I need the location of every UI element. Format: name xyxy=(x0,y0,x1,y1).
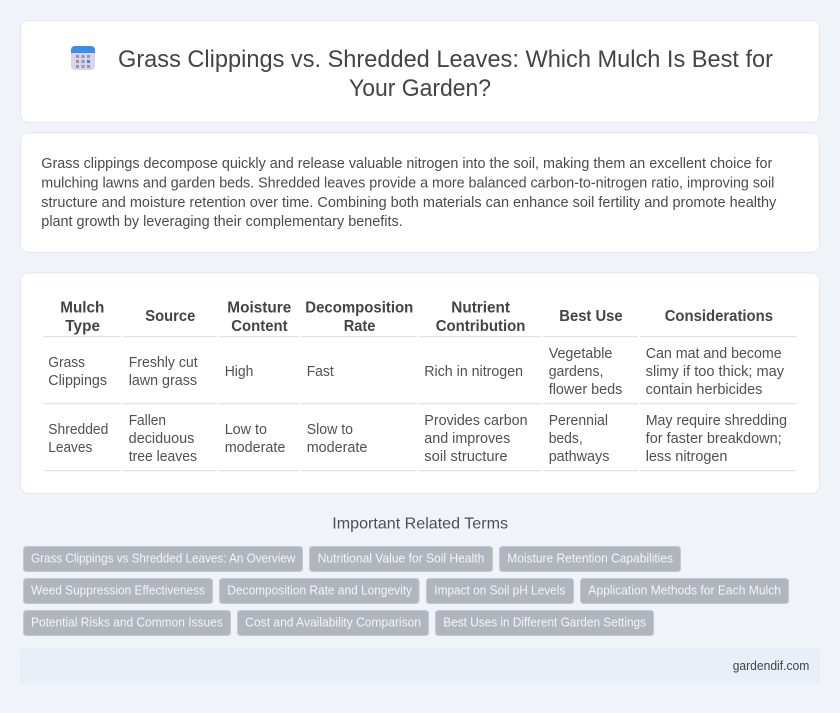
table row: shredded leaves: deciduous xyxy=(129,431,194,447)
table row: shredded leaves: tree leaves xyxy=(129,449,197,465)
related terms tags: Weed Suppression Effectiveness xyxy=(31,583,205,598)
table row: shredded leaves: soil structure xyxy=(424,449,508,465)
panel: comparison table xyxy=(20,273,820,494)
related terms tags xyxy=(24,546,788,636)
table row: grass clippings: contain herbicides xyxy=(646,382,762,398)
table header row: Content xyxy=(231,318,288,335)
table row: grass clippings: Rich in nitrogen xyxy=(424,364,523,380)
related terms tags: Nutritional Value for Soil Health xyxy=(318,551,484,566)
table header row: Type xyxy=(65,318,100,335)
intro text: Grass clippings decompose quickly and release valuable nitrogen into the soil, making them an excellent choice for xyxy=(41,156,772,172)
intro text: mulching lawns and garden beds. Shredded leaves provide a more balanced carbon-to-nitrogen ratio, improving soil xyxy=(41,176,774,192)
table header row: Source xyxy=(145,308,195,325)
table row: shredded leaves: moderate xyxy=(307,440,367,456)
intro text: plant growth by leveraging their complementary benefits. xyxy=(41,214,403,230)
table row: shredded leaves: less nitrogen xyxy=(646,449,727,465)
table row: shredded leaves: moderate xyxy=(225,440,285,456)
icon: calendar xyxy=(71,46,95,70)
table row: shredded leaves: Provides carbon xyxy=(424,413,528,429)
table row: shredded leaves: beds, xyxy=(549,431,583,447)
table row: grass clippings: flower beds xyxy=(549,382,622,398)
footer xyxy=(20,649,820,683)
related terms tags: Grass Clippings vs Shredded Leaves: An Overview xyxy=(31,551,296,566)
related terms tags: Application Methods for Each Mulch xyxy=(588,583,781,598)
table row: shredded leaves: Slow to xyxy=(307,422,353,438)
table row: grass clippings xyxy=(48,346,785,398)
table row: shredded leaves: pathways xyxy=(549,449,609,465)
related terms tags: Impact on Soil pH Levels xyxy=(434,583,565,598)
footer: gardendif.com xyxy=(733,658,809,673)
table row: shredded leaves: Low to xyxy=(225,422,267,438)
table row: shredded leaves: Leaves xyxy=(48,440,92,456)
table row: shredded leaves: Perennial xyxy=(549,413,608,429)
panel: intro paragraph xyxy=(20,133,820,252)
heading: important related terms: Important Related Terms xyxy=(332,515,508,532)
table row: shredded leaves: Fallen xyxy=(129,413,166,429)
table header row: Rate xyxy=(344,318,375,335)
table row: grass clippings: Vegetable xyxy=(549,346,612,362)
related terms tags: Decomposition Rate and Longevity xyxy=(227,583,413,598)
table header row: Mulch xyxy=(60,299,104,316)
table row: grass clippings: slimy if too thick; may xyxy=(646,364,785,380)
table header row: Best Use xyxy=(559,308,623,325)
table row: grass clippings: Grass xyxy=(48,355,85,371)
intro text xyxy=(41,156,777,230)
panel: title card xyxy=(20,20,820,122)
table row: grass clippings: Fast xyxy=(307,364,334,380)
related terms tags: Potential Risks and Common Issues xyxy=(31,615,223,630)
related terms tags: Best Uses in Different Garden Settings xyxy=(443,615,646,630)
table row: grass clippings: Clippings xyxy=(48,373,107,389)
table row: grass clippings: gardens, xyxy=(549,364,603,380)
related terms tags: Cost and Availability Comparison xyxy=(245,615,421,630)
table row: shredded leaves: Shredded xyxy=(48,422,108,438)
table header row: Decomposition xyxy=(305,299,413,316)
table header row: Nutrient xyxy=(451,299,511,316)
intro text: structure and moisture retention over time. Combining both materials can enhance soil fertility and promote healthy xyxy=(41,195,777,211)
table row: grass clippings: lawn grass xyxy=(129,373,197,389)
table row: grass clippings: Freshly cut xyxy=(129,355,198,371)
table header row: Contribution xyxy=(436,318,525,335)
title: Grass Clippings vs. Shredded Leaves: Which Mulch Is Best for xyxy=(118,46,773,73)
title xyxy=(118,46,773,102)
table row: shredded leaves: and improves xyxy=(424,431,510,447)
table header row: Moisture xyxy=(227,299,291,316)
related terms tags: Moisture Retention Capabilities xyxy=(507,551,673,566)
table header row: Considerations xyxy=(665,308,773,325)
table row: grass clippings: Can mat and become xyxy=(646,346,782,362)
table row: shredded leaves: for faster breakdown; xyxy=(646,431,782,447)
table row: shredded leaves: May require shredding xyxy=(646,413,787,429)
table row: grass clippings: High xyxy=(225,364,253,380)
table header row xyxy=(60,299,773,335)
title: Your Garden? xyxy=(349,75,491,102)
table row: shredded leaves xyxy=(48,413,787,465)
